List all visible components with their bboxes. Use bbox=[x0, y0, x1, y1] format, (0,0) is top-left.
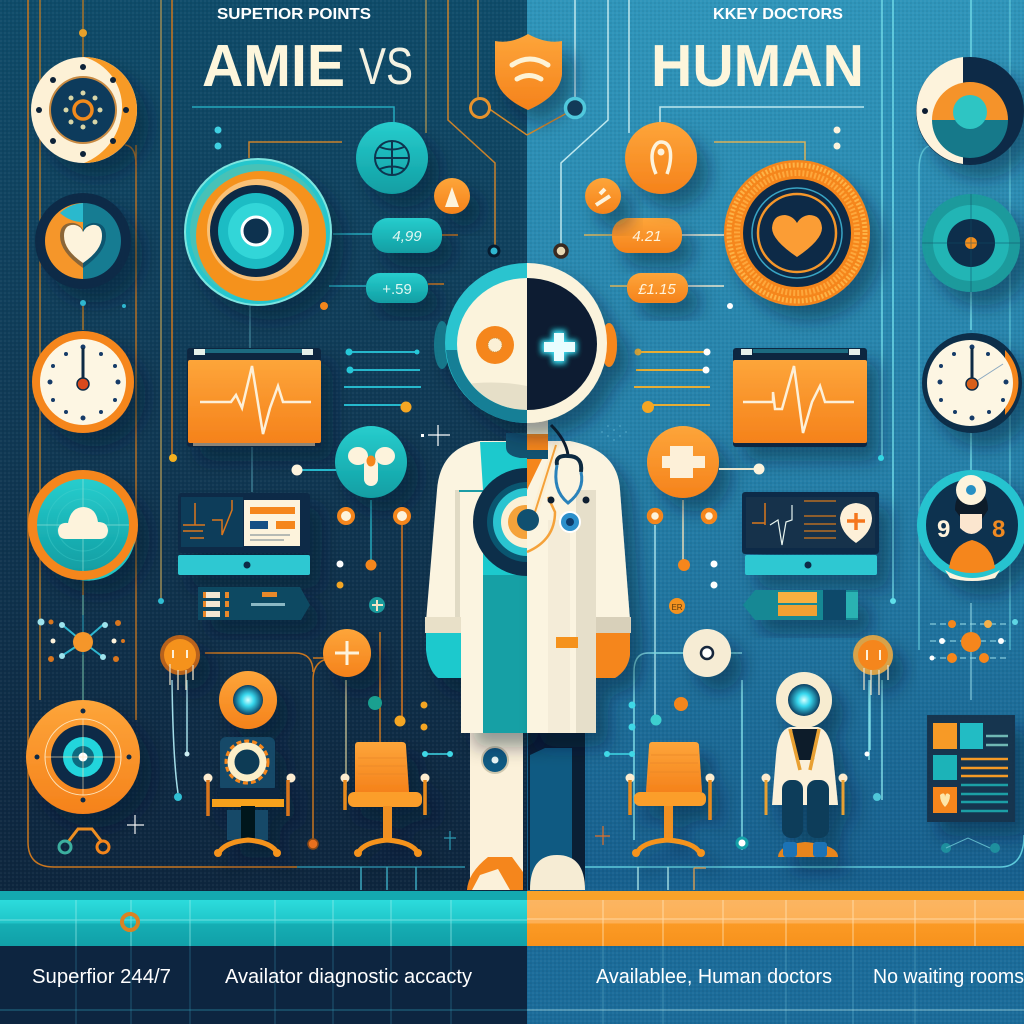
background: left dark navy half bbox=[0, 0, 527, 1024]
icon circle: orange cross bbox=[647, 426, 719, 498]
icon: small link symbol bbox=[59, 829, 109, 853]
ecg monitor: right bbox=[733, 348, 867, 447]
chair: left orange bbox=[340, 742, 430, 857]
footer background: left bbox=[0, 946, 527, 1024]
figure: chest dial bbox=[473, 468, 527, 576]
right info panel bbox=[927, 715, 1015, 822]
pill: right value two bbox=[627, 273, 688, 303]
figure: left leg bbox=[470, 733, 523, 890]
pill: left value one: 4,99 bbox=[392, 228, 422, 245]
right column badge: clock bbox=[922, 333, 1022, 433]
left column badge: clock bbox=[32, 331, 134, 433]
right column badge: split dial bbox=[916, 57, 1024, 165]
left spark node cluster bbox=[38, 595, 125, 700]
figure: right leg bbox=[528, 733, 585, 890]
right column badge: doctor portrait: 9 bbox=[937, 516, 950, 543]
footer text: human doctors: Availablee, Human doctors bbox=[596, 966, 832, 988]
seated doctor: right bbox=[762, 672, 848, 857]
right column badge: doctor portrait: 8 bbox=[992, 516, 1005, 543]
data tag: left bbox=[198, 587, 310, 620]
small orange nodes: left bbox=[336, 509, 409, 613]
big target: heart bbox=[724, 160, 870, 306]
ecg monitor: left bbox=[187, 348, 321, 447]
chip icon: right bbox=[853, 635, 893, 695]
figure: head bbox=[434, 263, 617, 423]
band marker ring bbox=[122, 914, 138, 930]
title: HUMAN: HUMAN bbox=[651, 33, 864, 99]
figure: coat left bbox=[425, 441, 527, 733]
robot-doctor central figure bbox=[425, 263, 631, 890]
title: VS: VS bbox=[359, 38, 413, 96]
icon: central shield bbox=[495, 34, 562, 110]
icon: white plus mark bbox=[127, 815, 144, 834]
connector node: right ring bbox=[566, 98, 584, 118]
background: right blue half bbox=[527, 0, 1024, 1024]
icon circle: cream ring bbox=[683, 629, 731, 677]
title: AMIE VS: AMIE bbox=[202, 33, 345, 99]
left column badge: heart bbox=[35, 193, 131, 289]
icon circle: globe bbox=[356, 122, 428, 194]
figure: collar and neck bbox=[506, 420, 548, 490]
big target: AI sensor bbox=[185, 159, 331, 305]
dashboard monitor: right bbox=[742, 492, 879, 575]
figure: left boot bbox=[467, 857, 523, 890]
figure: right boot bbox=[530, 855, 585, 890]
figure: stethoscope bbox=[517, 425, 590, 552]
pill: left value two bbox=[366, 273, 428, 303]
footer background: right bbox=[527, 946, 1024, 1024]
pill: right value one: 4.21 bbox=[632, 228, 662, 245]
small orange nodes: right bbox=[649, 510, 718, 614]
icon circle: small orange bbox=[434, 178, 470, 214]
pill: right value one bbox=[612, 218, 682, 253]
left column badge: cloud bbox=[28, 470, 138, 581]
data lines: left bbox=[344, 348, 421, 412]
icon: right panel link nodes bbox=[941, 838, 1000, 853]
right spark node cluster bbox=[930, 603, 1018, 700]
connector node: left lower dot bbox=[489, 246, 499, 256]
data tag: right bbox=[743, 590, 858, 620]
right column badge: doctor portrait bbox=[917, 470, 1024, 581]
bottom band: teal bbox=[0, 891, 527, 946]
title: left eyebrow: SUPETIOR POINTS bbox=[217, 6, 371, 23]
connector node: orange cross bbox=[719, 464, 764, 474]
chip icon: left bbox=[160, 635, 200, 690]
icon circle: right small orange bbox=[585, 178, 621, 214]
left column badge: cream dial bbox=[31, 57, 137, 163]
icon circle: right orange organ bbox=[625, 122, 697, 194]
dashboard monitor: left bbox=[178, 493, 310, 575]
footer text: no waiting rooms: No waiting rooms bbox=[873, 966, 1024, 988]
small orange nodes: right: ER bbox=[671, 603, 683, 612]
figure: coat right bbox=[527, 441, 631, 733]
icon circle: orange plus bbox=[323, 629, 371, 677]
pill: left value one bbox=[372, 218, 442, 253]
figure: knee joint bbox=[482, 747, 508, 773]
footer text: availator: Availator diagnostic accacty bbox=[225, 966, 472, 988]
left column badge: orange target bbox=[26, 700, 140, 814]
connector node: flower bbox=[292, 464, 336, 476]
bottom band: orange bbox=[527, 891, 1024, 946]
chair with robot: left bbox=[204, 671, 296, 857]
connector node: left ring bbox=[470, 98, 490, 118]
icon circle: flower / bow bbox=[335, 426, 407, 498]
data lines: right bbox=[634, 348, 710, 413]
footer text: superior: Superfior 244/7 bbox=[32, 966, 171, 988]
title: right eyebrow: KKEY DOCTORS bbox=[713, 6, 843, 23]
pill: left value two: +.59 bbox=[382, 281, 412, 298]
chair: right orange bbox=[626, 742, 714, 857]
small accent dots bbox=[79, 29, 896, 850]
sparkles near figure bbox=[421, 425, 627, 446]
right column badge: teal target bbox=[922, 194, 1020, 292]
pill: right value two: £1.15 bbox=[637, 281, 676, 298]
connector node: right lower dot bbox=[555, 245, 567, 257]
